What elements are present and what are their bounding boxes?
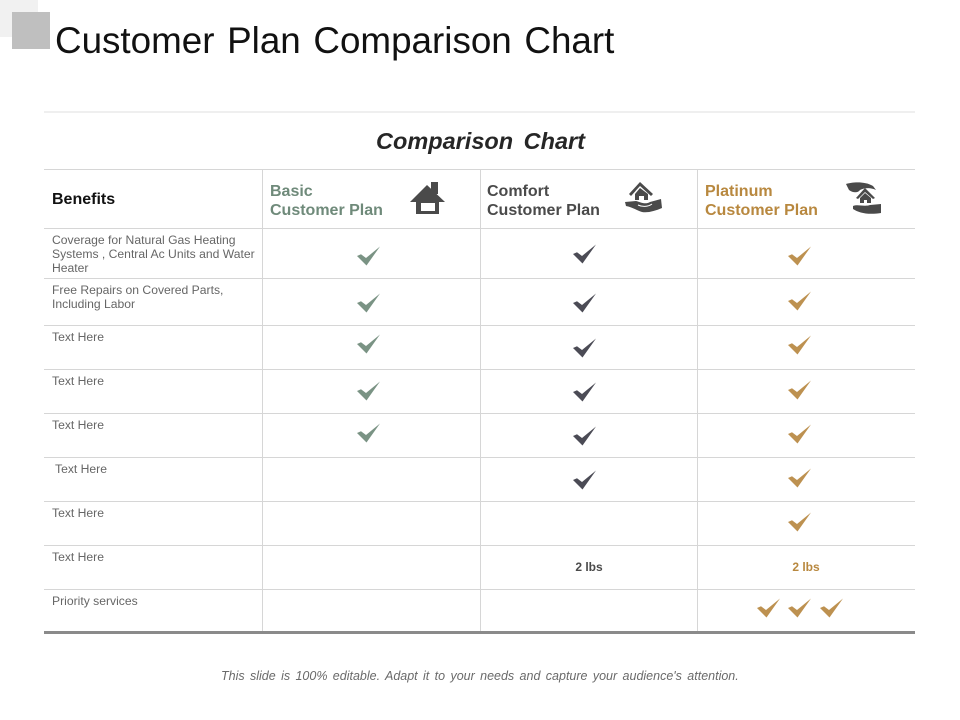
- icon: house: [410, 182, 445, 214]
- column header: comfort customer plan: [487, 183, 600, 219]
- row labels: Text Here: [52, 418, 104, 432]
- row labels: [52, 233, 255, 608]
- checks: platinum plan: [757, 246, 843, 618]
- column header: comfort customer plan: Comfort: [487, 183, 550, 200]
- row labels: Free Repairs on Covered Parts,: [52, 283, 223, 297]
- value: platinum 2 lbs: 2 lbs: [792, 560, 820, 574]
- icon: title square: [12, 12, 50, 49]
- row labels: Text Here: [52, 330, 104, 344]
- column header: platinum customer plan: Platinum: [705, 183, 773, 200]
- row labels: Text Here: [52, 506, 104, 520]
- column header: basic customer plan: Customer Plan: [270, 202, 383, 219]
- row labels: Text Here: [52, 374, 104, 388]
- column header: platinum customer plan: Customer Plan: [705, 202, 818, 219]
- row labels: Heater: [52, 261, 88, 275]
- column header: benefits: Benefits: [52, 191, 115, 208]
- checks: basic plan: [357, 246, 380, 442]
- row labels: Including Labor: [52, 297, 135, 311]
- table grid: [44, 169, 915, 634]
- column header: comfort customer plan: Customer Plan: [487, 202, 600, 219]
- column header: platinum customer plan: [705, 183, 818, 219]
- row labels: Coverage for Natural Gas Heating: [52, 233, 236, 247]
- footer note: This slide is 100% editable. Adapt it to your needs and capture your audience's attention.: [221, 669, 739, 683]
- column header: basic customer plan: Basic: [270, 183, 313, 200]
- column header: basic customer plan: [270, 183, 383, 219]
- value: comfort 2 lbs: 2 lbs: [575, 560, 603, 574]
- row labels: Text Here: [52, 550, 104, 564]
- row labels: Priority services: [52, 594, 138, 608]
- title: Customer Plan Comparison Chart: [55, 20, 614, 61]
- row labels: Text Here: [55, 462, 107, 476]
- icon: house between hands: [846, 182, 881, 214]
- checks: comfort plan: [573, 244, 596, 490]
- heading: comparison chart: Comparison Chart: [376, 128, 586, 154]
- icon: house on hand: [625, 182, 662, 212]
- row labels: Systems , Central Ac Units and Water: [52, 247, 255, 261]
